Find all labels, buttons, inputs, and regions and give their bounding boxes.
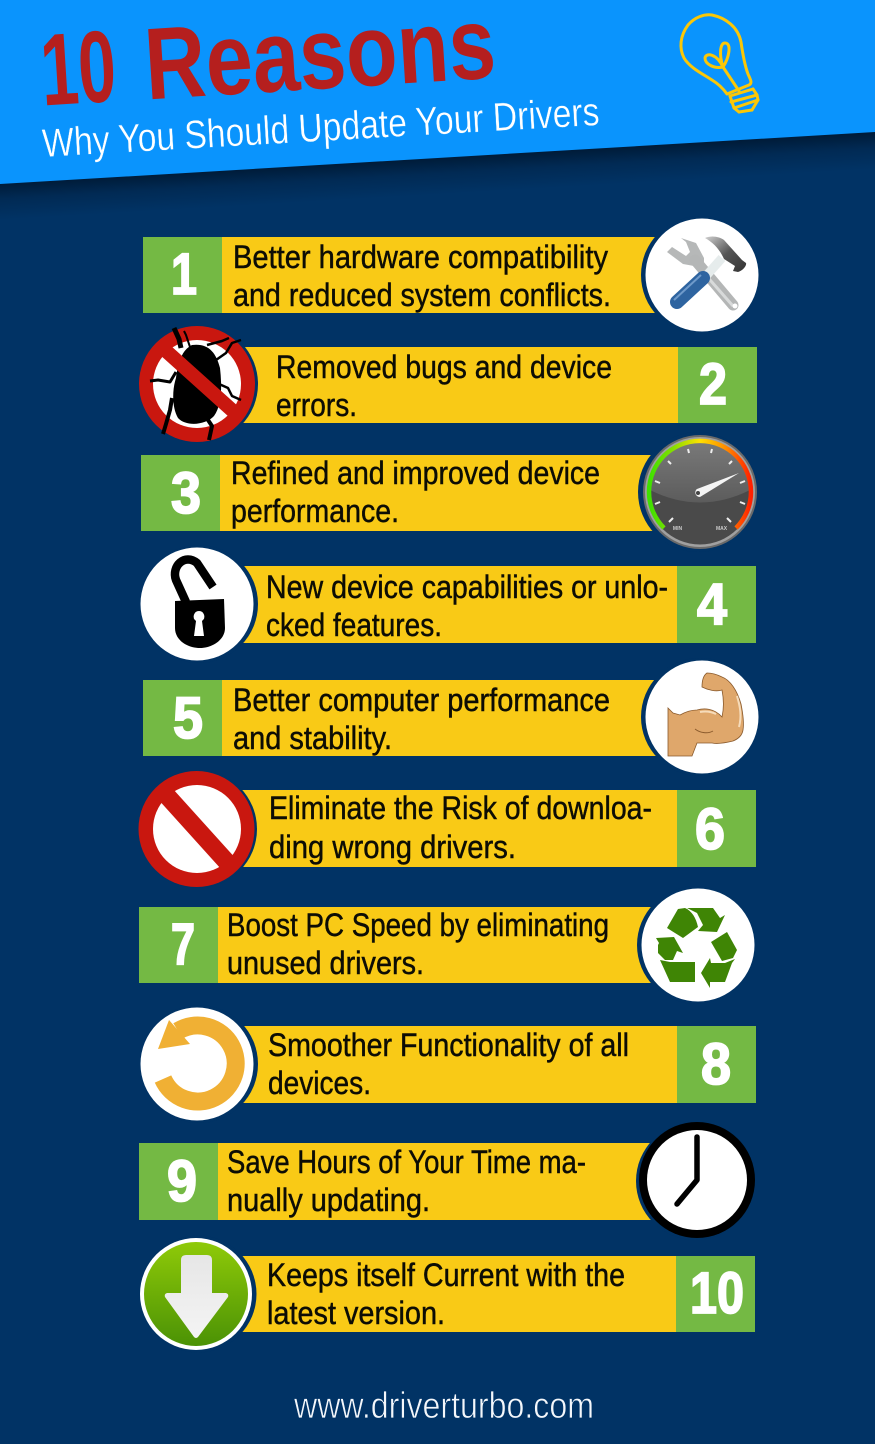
- row 3 text: performance.: [231, 493, 399, 529]
- row 5 text: and stability.: [233, 720, 392, 756]
- row 2: [139, 325, 757, 443]
- row 8 number box: [677, 1026, 756, 1103]
- row 6 number: 6: [695, 797, 725, 862]
- row 6 text: [269, 790, 652, 865]
- row 8 text: devices.: [268, 1065, 371, 1101]
- row 3 number: 3: [171, 461, 201, 526]
- row 6 bar: [236, 790, 677, 867]
- row 8 text: Smoother Functionality of all: [268, 1027, 629, 1063]
- header shadow: [0, 130, 875, 221]
- row 1 text: Better hardware compatibility: [233, 239, 608, 275]
- row 5 bar: [222, 680, 662, 756]
- row 10: [140, 1236, 755, 1352]
- row 4 text: cked features.: [266, 607, 442, 643]
- row 9: [139, 1122, 755, 1240]
- icon: refresh arrow: [140, 1005, 258, 1123]
- row 7: [139, 886, 755, 1004]
- row 2 text: Removed bugs and device: [276, 349, 612, 385]
- row 8 number: 8: [701, 1032, 731, 1097]
- icon: light bulb: [681, 15, 758, 112]
- row 6: [138, 770, 756, 888]
- subtitle: Why You Should Update Your Drivers: [41, 90, 601, 166]
- title: [37, 0, 499, 127]
- icon: flexed arm: [641, 658, 759, 776]
- row 1 text: [233, 239, 611, 313]
- row 5 number: 5: [173, 686, 203, 751]
- row 2 number: 2: [699, 352, 727, 417]
- icon: prohibition sign: [138, 770, 257, 888]
- header banner: [0, 0, 875, 184]
- row 2 text: errors.: [276, 387, 357, 423]
- row 7 text: Boost PC Speed by eliminating: [227, 907, 609, 943]
- icon: bug with prohibition sign: [139, 325, 258, 443]
- row 3 text: [231, 455, 600, 529]
- row 8 text: [268, 1027, 629, 1101]
- row 4 number: 4: [697, 572, 727, 637]
- icon: speedometer gauge: MIN: [673, 526, 682, 532]
- row 7 number: 7: [171, 912, 195, 977]
- icon: speedometer gauge: MAX: [716, 526, 728, 532]
- row 2 number box: [678, 347, 757, 423]
- row 10 number: 10: [690, 1261, 744, 1326]
- row 3: [141, 432, 758, 552]
- row 1: [143, 216, 759, 334]
- row 4 bar: [236, 566, 677, 643]
- row 3 number box: [141, 455, 220, 531]
- row 1 bar: [222, 237, 662, 313]
- row 6 text: ding wrong drivers.: [269, 829, 516, 865]
- row 10 text: [267, 1257, 625, 1331]
- row 10 text: latest version.: [267, 1295, 445, 1331]
- row 5: [143, 658, 759, 776]
- row 4: [140, 545, 756, 663]
- row 9 text: Save Hours of Your Time ma-: [227, 1144, 586, 1180]
- row 5 text: [233, 682, 610, 756]
- footer url: www.driverturbo.com: [293, 1385, 594, 1426]
- row 3 bar: [220, 455, 660, 531]
- row 2 text: [276, 349, 612, 423]
- icon: wrench and hammer: [641, 216, 759, 334]
- row 10 bar: [235, 1256, 676, 1332]
- row 9 bar: [218, 1143, 658, 1220]
- icon: clock: [636, 1122, 755, 1240]
- row 4 text: New device capabilities or unlo-: [266, 569, 668, 605]
- row 5 text: Better computer performance: [233, 682, 610, 718]
- row 1 number: 1: [171, 242, 197, 307]
- row 9 text: nually updating.: [227, 1182, 430, 1218]
- row 7 text: [227, 907, 609, 981]
- row 9 number box: [139, 1143, 218, 1220]
- row 7 text: unused drivers.: [227, 945, 424, 981]
- row 7 bar: [218, 907, 658, 983]
- row 6 number box: [677, 790, 756, 867]
- row 8 bar: [236, 1026, 677, 1103]
- row 6 text: Eliminate the Risk of downloa-: [269, 790, 652, 826]
- row 10 text: Keeps itself Current with the: [267, 1257, 625, 1293]
- row 7 number box: [139, 907, 218, 983]
- row 9 text: [227, 1144, 586, 1218]
- row 4 text: [266, 569, 668, 643]
- row 3 text: Refined and improved device: [231, 455, 600, 491]
- row 4 number box: [677, 566, 756, 643]
- icon: open padlock: [140, 545, 258, 663]
- icon: download arrow: [140, 1236, 256, 1352]
- row 8: [140, 1005, 756, 1123]
- row 10 number box: [676, 1256, 755, 1332]
- title: 10: [37, 9, 119, 127]
- icon: recycle symbol: [637, 886, 755, 1004]
- row 5 number box: [143, 680, 222, 756]
- row 1 text: and reduced system conflicts.: [233, 277, 611, 313]
- row 2 bar: [235, 347, 678, 423]
- row 9 number: 9: [167, 1149, 197, 1214]
- icon: speedometer gauge: [638, 432, 758, 552]
- row 1 number box: [143, 237, 222, 313]
